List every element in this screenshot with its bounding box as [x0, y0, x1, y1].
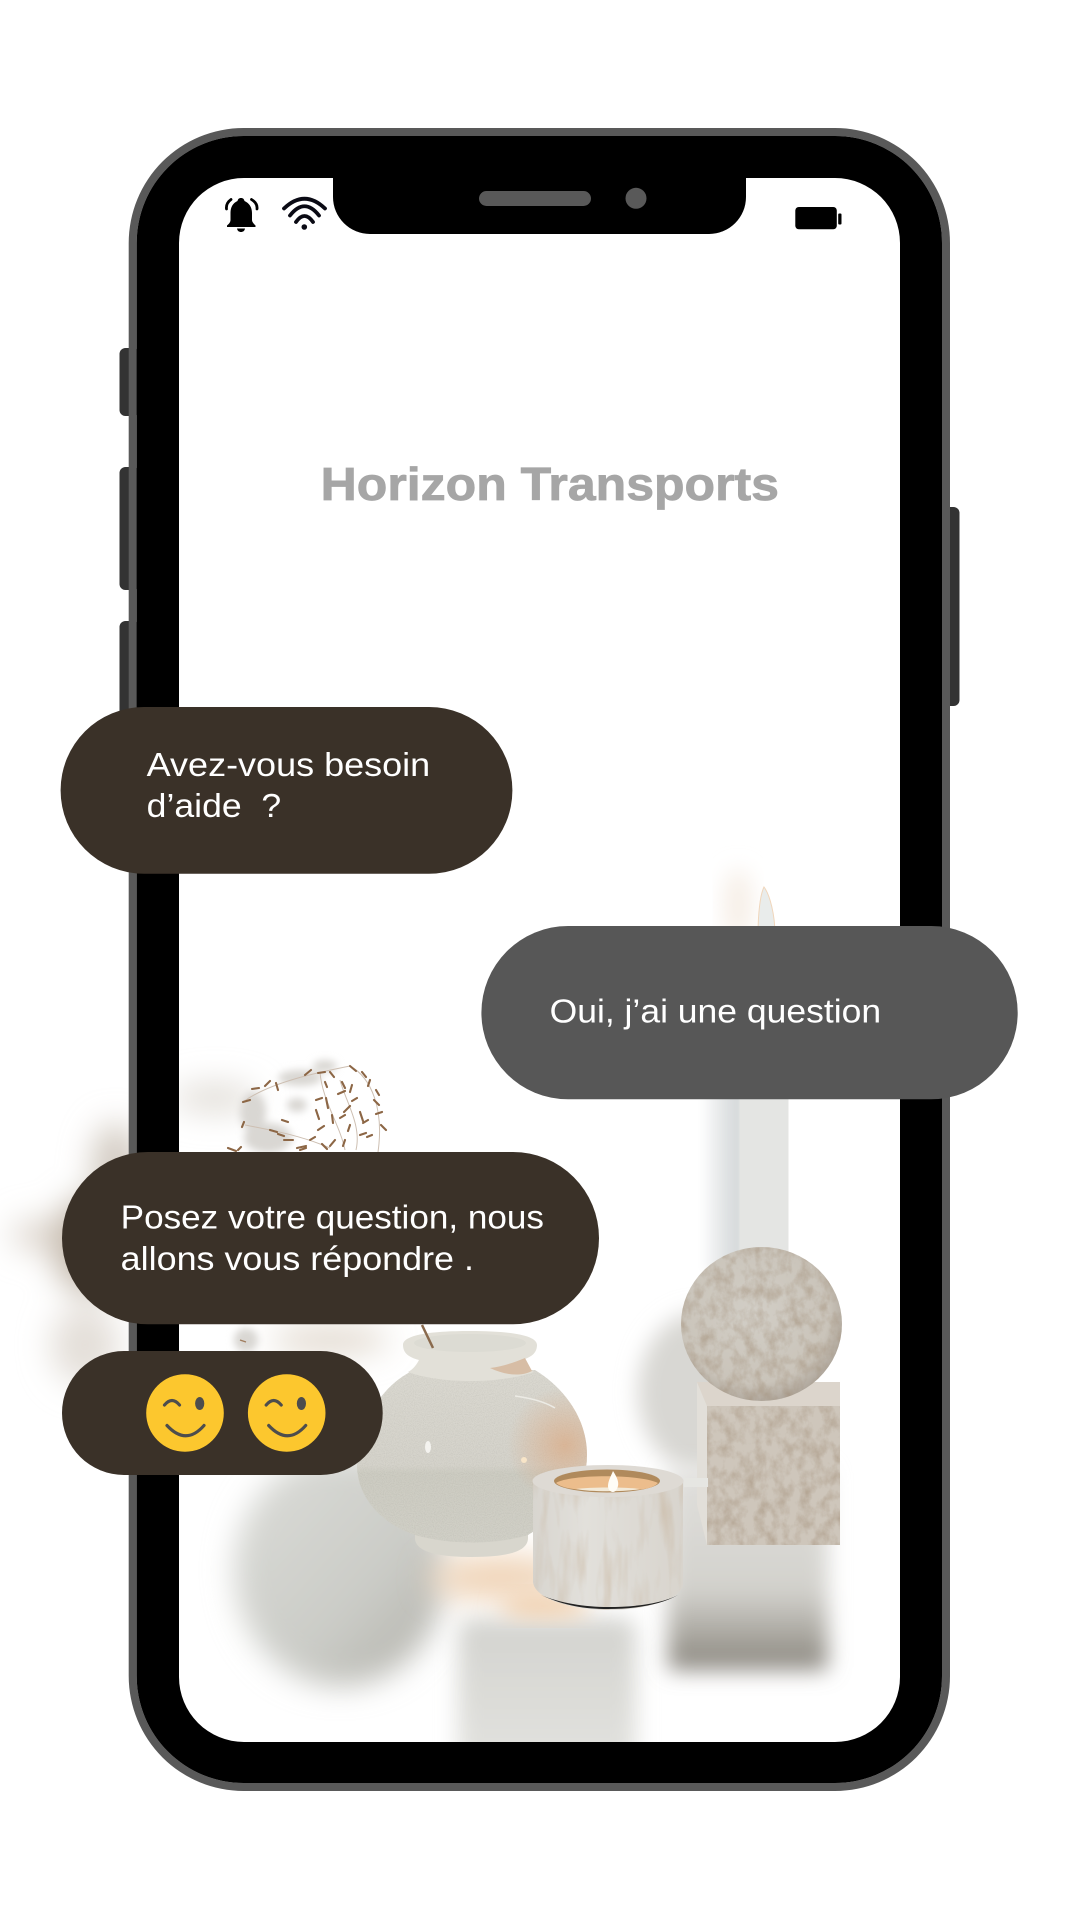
icon: battery — [795, 207, 842, 229]
icon: winking smiley 2 — [248, 1374, 326, 1452]
connector between tealight and cube — [697, 1478, 708, 1487]
side button: upper left — [120, 348, 140, 416]
blurred vase shadow — [234, 1454, 446, 1686]
vase — [357, 1325, 587, 1557]
icon: bell — [226, 198, 257, 232]
photo: candles, vase and marble still life — [10, 869, 842, 1768]
chat bubble: answer — [481, 926, 1018, 1099]
phone frame — [129, 128, 950, 1791]
ball candle holder — [681, 1247, 842, 1545]
blurred shadows on the left side — [10, 1084, 390, 1385]
notch — [333, 170, 746, 234]
speaker — [479, 191, 591, 206]
side button: middle left — [120, 467, 140, 590]
chat bubble: invitation: allons vous répondre . — [121, 1240, 474, 1277]
blurred cube shadow — [668, 1470, 828, 1670]
blurred tealight shadow — [458, 1618, 636, 1768]
chat bubble: question — [61, 707, 512, 874]
chat bubble: invitation: Posez votre question, nous — [121, 1198, 544, 1235]
blurred candle shadow — [707, 1099, 740, 1266]
chat bubble: answer: Oui, j’ai une question — [550, 993, 881, 1030]
chat bubble: invitation — [62, 1152, 599, 1324]
tealight — [532, 1465, 684, 1610]
chat bubble: question: Avez-vous besoin — [147, 746, 430, 783]
side button: right — [940, 507, 960, 706]
icon: wifi — [284, 199, 325, 230]
blurred ball shadow — [630, 1306, 708, 1472]
side button: lower left — [120, 621, 140, 716]
blurred candle glow — [430, 1556, 570, 1600]
camera — [626, 188, 646, 209]
icon: winking smiley 1 — [146, 1374, 224, 1452]
dried plant — [228, 1060, 386, 1355]
chat bubble: smileys — [62, 1351, 383, 1475]
title: Horizon Transports — [321, 458, 779, 510]
chat bubble: question: d’aide ? — [147, 787, 281, 824]
candle — [740, 887, 788, 1255]
